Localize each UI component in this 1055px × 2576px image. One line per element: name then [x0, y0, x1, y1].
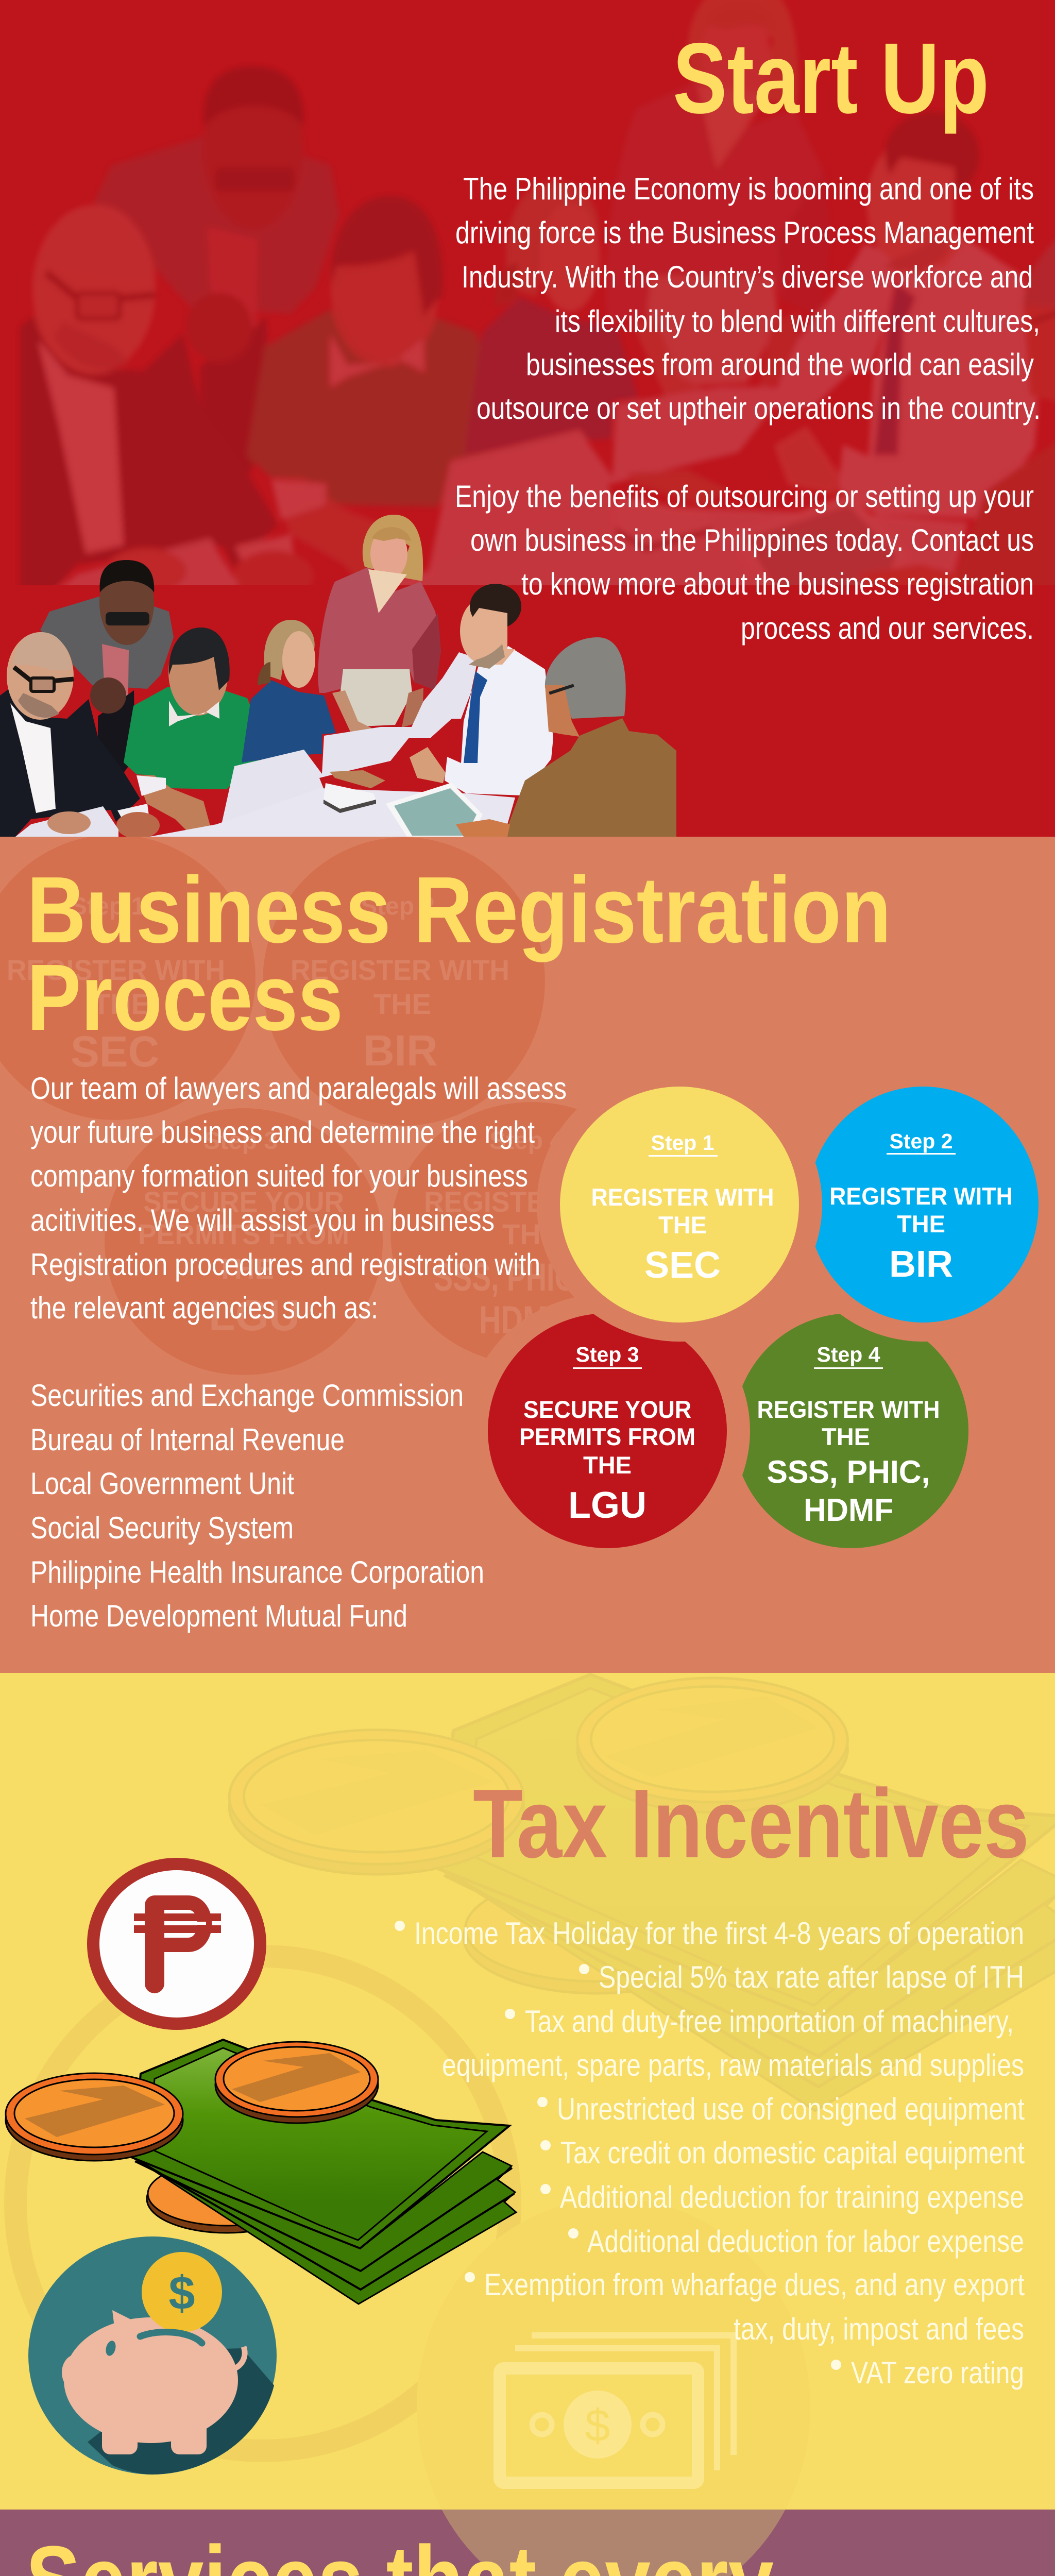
step 1 circle [537, 1067, 822, 1342]
step 2 label: REGISTER WITH [829, 1182, 1013, 1210]
panel: business registration process [0, 835, 1055, 1673]
step 1 label: REGISTER WITH [591, 1183, 774, 1211]
background: faded step circles: Step 2 [361, 893, 435, 920]
icon: piggy bank [28, 2236, 277, 2475]
text block: team description: company formation suited for your business [30, 1159, 528, 1193]
background: faded step circles: THE [93, 988, 150, 1020]
step 1 label [591, 1131, 774, 1286]
background: faded step circles: Step 1 [71, 893, 145, 920]
step 2 circle [785, 1067, 1055, 1342]
background: faded step circles: REGISTER WITH [291, 954, 509, 986]
background: faded step circles: THE [216, 1252, 274, 1285]
text block: team description: your future business and determine the right [30, 1115, 535, 1149]
panel: tax incentives [0, 1673, 1055, 2576]
background: faded step circles: THE [373, 988, 431, 1020]
step 3 label: PERMITS FROM [519, 1423, 695, 1450]
step 1 label: SEC [644, 1245, 721, 1286]
list: agencies: Bureau of Internal Revenue [30, 1422, 345, 1457]
step 3 label: LGU [568, 1485, 646, 1526]
step 2 label: THE [897, 1210, 945, 1238]
list: incentives [395, 1916, 1025, 2390]
step 2 label: Step 2 [889, 1129, 953, 1153]
background: faded coins, ring and banknotes [15, 1674, 1055, 2576]
step 3 label: SECURE YOUR [523, 1396, 691, 1423]
step 4 label: Step 4 [816, 1343, 880, 1366]
text block: team description [30, 1071, 567, 1325]
background: faded step circles: Step 4 [489, 1127, 564, 1155]
background: faded step circles: SSS, PHIC, [434, 1256, 583, 1299]
text block: team description: Our team of lawyers and paralegals will assess [30, 1071, 567, 1106]
background: faded step circles: LGU [209, 1291, 300, 1340]
step 2 label: BIR [889, 1244, 953, 1285]
list: incentives: VAT zero rating [851, 2355, 1024, 2390]
step 1 label: Step 1 [651, 1131, 714, 1155]
background: faded step circles: REGISTER WITH [7, 954, 225, 986]
list: agencies: Social Security System [30, 1511, 294, 1545]
list: agencies [30, 1378, 484, 1633]
step 4 label: REGISTER WITH [757, 1396, 940, 1423]
heading: Business Registration Process: Process [27, 944, 343, 1050]
heading: Business Registration Process [27, 857, 891, 1050]
step 2 label [829, 1129, 1013, 1285]
heading: Start Up: Start Up [673, 22, 989, 134]
photo: business team around table [0, 515, 676, 839]
background: faded staff photo [31, 2510, 785, 2576]
background photo: faded team [20, 0, 1055, 602]
heading: Business Registration Process: Business Registration [27, 857, 891, 962]
background: faded step circles: Step 3 [203, 1127, 278, 1155]
background: faded coins, ring and banknotes: $ [585, 2400, 610, 2451]
panel: services [0, 2510, 1055, 2576]
list: agencies: Home Development Mutual Fund [30, 1599, 407, 1633]
text block: team description: acitivities. We will assist you in business [30, 1203, 495, 1238]
step 4 label: THE [822, 1423, 870, 1450]
background: faded step circles [0, 837, 577, 1375]
background: faded step circles: THE [502, 1218, 560, 1250]
step 3 label: Step 3 [575, 1343, 639, 1366]
list: agencies: Philippine Health Insurance Corporation [30, 1555, 484, 1589]
panel: start up [0, 0, 1055, 839]
text block: team description: the relevant agencies such as: [30, 1291, 378, 1325]
step 4 circle [734, 1313, 968, 1548]
step 4 label: HDMF [804, 1493, 893, 1528]
step 1 label: THE [658, 1211, 707, 1239]
icon: piggy bank: $ [168, 2267, 195, 2319]
step 4 label: SSS, PHIC, [767, 1454, 930, 1490]
text block: team description: Registration procedures and registration with [30, 1247, 540, 1282]
text block: intro [455, 172, 1041, 646]
step 3 label: THE [583, 1451, 632, 1479]
step 3 label [519, 1343, 695, 1526]
background: faded step circles: SECURE YOUR [143, 1185, 344, 1218]
icon: cash and coins [6, 2040, 516, 2304]
background: faded step circles: BIR [363, 1026, 438, 1075]
background: faded step circles: PERMITS FROM [138, 1218, 349, 1250]
list: agencies: Local Government Unit [30, 1466, 294, 1501]
list: agencies: Securities and Exchange Commission [30, 1378, 464, 1413]
step 4 label [757, 1343, 940, 1528]
background: faded step circles: SEC [71, 1027, 159, 1076]
background: faded step circles: HDMF [479, 1298, 567, 1342]
icon: peso coin [87, 1858, 266, 2030]
background: faded step circles: REGISTER WITH [424, 1185, 643, 1218]
step 3 circle [465, 1294, 750, 1568]
